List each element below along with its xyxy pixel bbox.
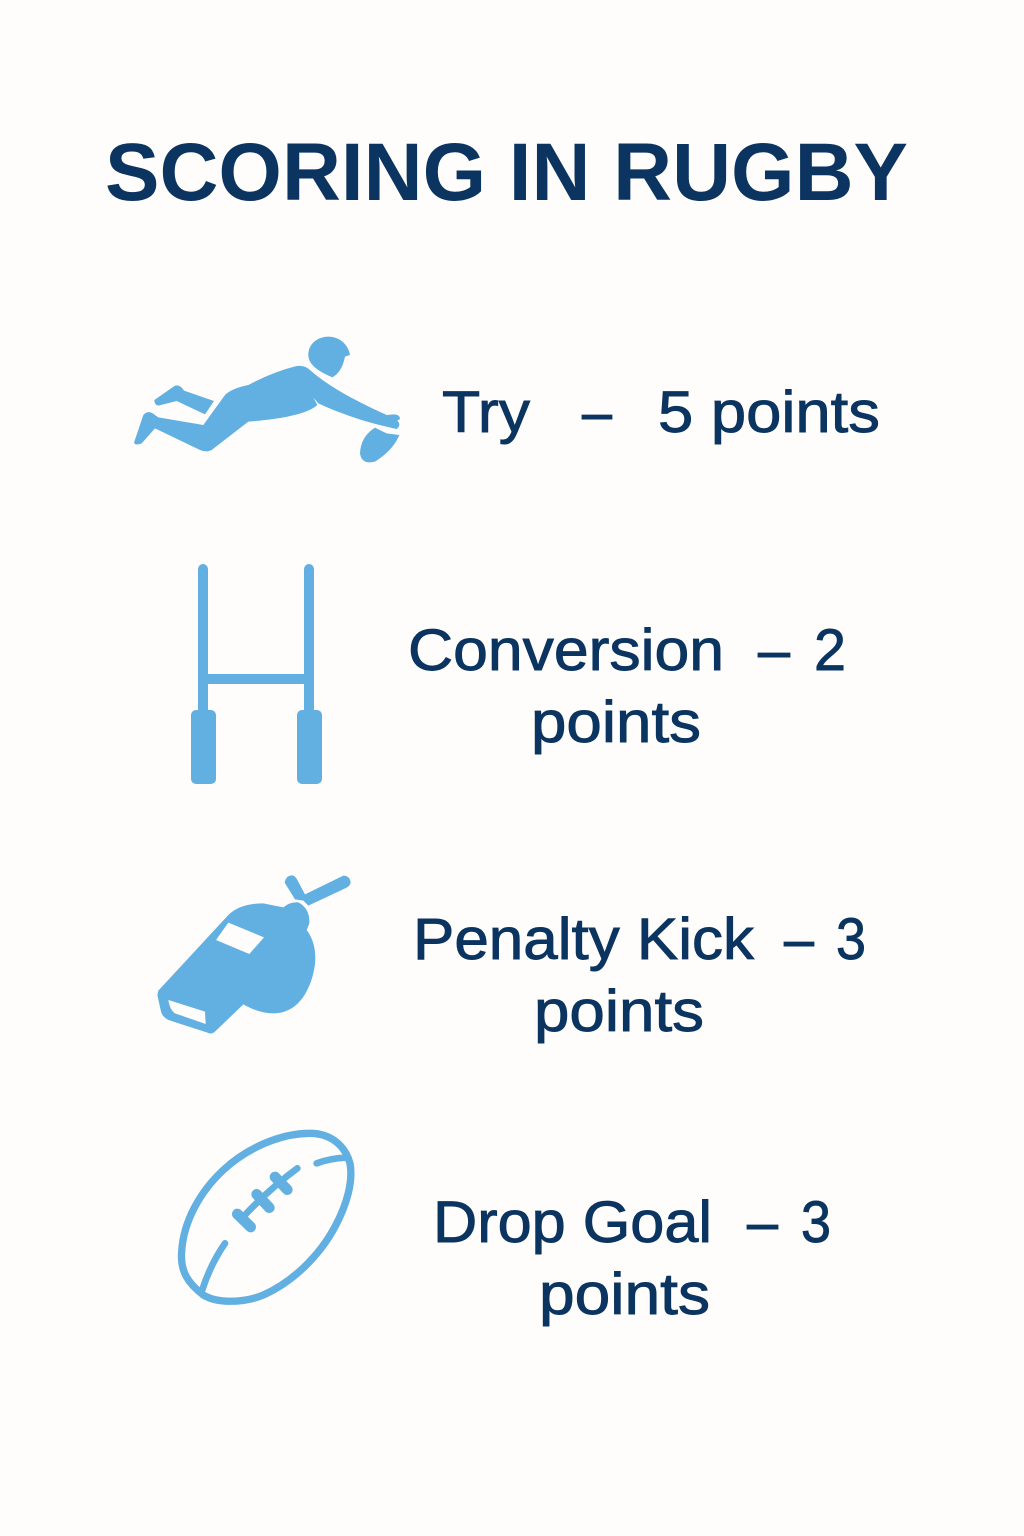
label: conversion: – — [758, 618, 791, 683]
label: conversion: points — [531, 690, 701, 755]
label: drop goal: – — [747, 1190, 779, 1255]
icon: goal posts — [191, 564, 322, 784]
title: SCORING IN RUGBY — [105, 127, 908, 218]
label: try: Try — [442, 380, 530, 445]
label: drop goal: 3 — [801, 1190, 831, 1255]
label: drop goal — [433, 1190, 831, 1327]
label: drop goal: points — [539, 1262, 710, 1327]
label: conversion: 2 — [814, 618, 846, 683]
label: conversion: Conversion — [408, 618, 724, 683]
label: try: – — [582, 380, 613, 445]
label: drop goal: Drop Goal — [433, 1190, 712, 1255]
label: penalty kick: – — [784, 907, 815, 972]
icon: rugby ball — [181, 1133, 351, 1301]
label: try: 5 points — [658, 380, 880, 445]
label: conversion — [408, 618, 846, 755]
icon: whistle — [157, 875, 351, 1034]
label: penalty kick: points — [534, 979, 704, 1044]
label: penalty kick: 3 — [836, 907, 866, 972]
label: penalty kick — [413, 907, 866, 1044]
icon: diving player scoring a try — [134, 337, 400, 462]
label: try — [442, 380, 880, 445]
label: penalty kick: Penalty Kick — [413, 907, 755, 972]
